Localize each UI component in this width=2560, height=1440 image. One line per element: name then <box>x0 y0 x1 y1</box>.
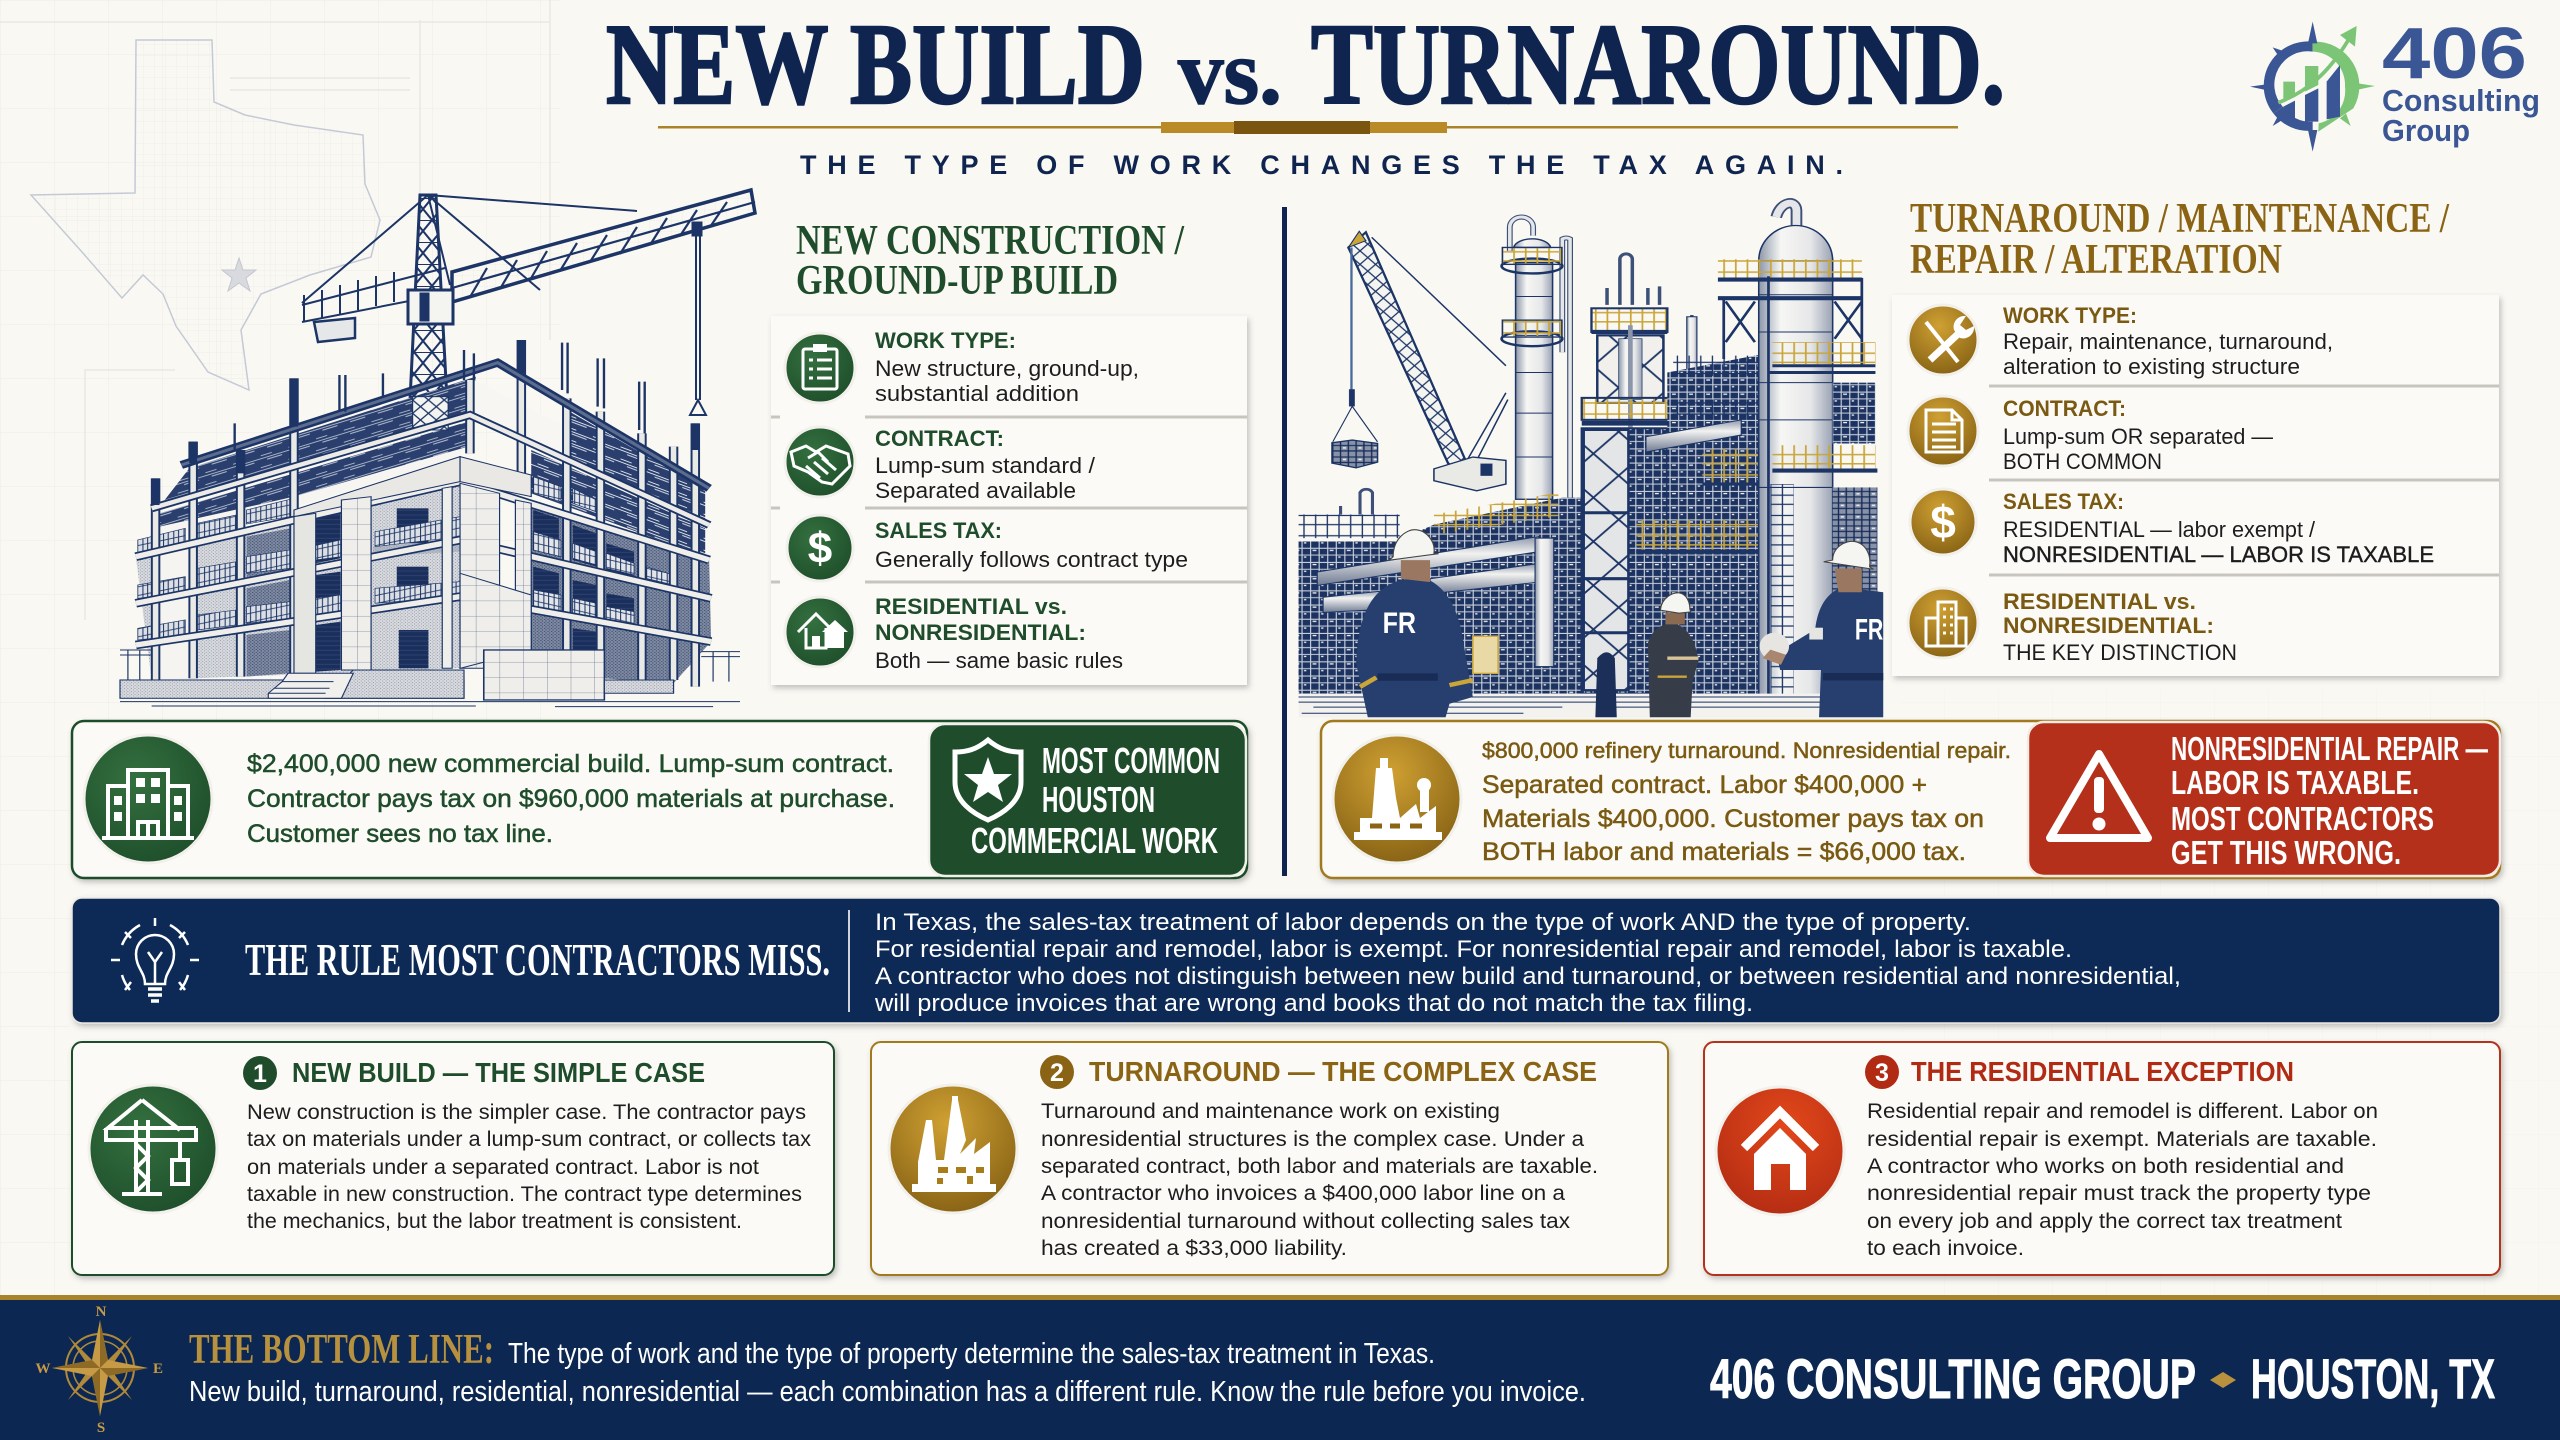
text: the bottom line <box>189 1327 1586 1408</box>
text: sales tax: SALES TAX: <box>875 518 1002 543</box>
number badge 1: 1 <box>253 1060 267 1088</box>
icon: light bulb <box>111 918 199 1001</box>
text: residential exception body: on every job and apply the correct tax treatment <box>1867 1210 2342 1233</box>
banner: the rule most contractors miss <box>72 898 2500 1023</box>
illustration: open upper storeys <box>160 377 705 557</box>
panel: new construction details <box>771 316 1247 685</box>
illustration: railings <box>138 477 674 640</box>
icon: warning triangle <box>2050 754 2148 838</box>
badge: most common houston commercial work: HOUSTON <box>1042 779 1155 820</box>
text: work type <box>2003 303 2333 379</box>
text: new build body <box>247 1101 812 1233</box>
number badge 1 <box>243 1056 277 1090</box>
heading: rule: THE RULE MOST CONTRACTORS MISS. <box>245 934 830 985</box>
icon: dollar: $ <box>1930 496 1956 548</box>
text: work type: WORK TYPE: <box>875 328 1016 353</box>
icon: factory <box>889 1085 1017 1213</box>
text: contract: Lump-sum OR separated — <box>2003 424 2273 449</box>
heading: new construction: GROUND-UP BUILD <box>796 258 1118 304</box>
icon: houses <box>785 597 855 667</box>
illustration: building under construction <box>120 340 740 707</box>
text: turnaround body: A contractor who invoices a $400,000 labor line on a <box>1041 1182 1565 1205</box>
panel: turnaround example <box>1321 721 2500 878</box>
text: residential exception body: Residential repair and remodel is different. Labor on <box>1867 1100 2378 1123</box>
map: Texas outline <box>0 0 550 620</box>
illustration: background worker <box>1595 652 1617 717</box>
logo: 406 Consulting Group <box>2250 14 2540 152</box>
illustration: crawler crane <box>1332 231 1508 491</box>
icon: crane <box>89 1085 217 1213</box>
illustration: center plant block <box>1636 352 1772 694</box>
text: new build body: New construction is the simpler case. The contractor pays <box>247 1101 806 1124</box>
icon: compass rose: E <box>153 1361 163 1377</box>
text: rule explanation: will produce invoices that are wrong and books that do not match the tax filing. <box>874 990 1753 1017</box>
icon: refinery <box>1333 735 1461 863</box>
text: residential vs nonresidential <box>2003 589 2237 665</box>
title: vs. <box>1178 21 1282 123</box>
text: turnaround body: Turnaround and maintenance work on existing <box>1041 1100 1500 1123</box>
number badge 3: 3 <box>1875 1059 1889 1087</box>
footer band <box>0 1295 2560 1440</box>
heading: turnaround: TURNAROUND — THE COMPLEX CASE <box>1089 1056 1597 1087</box>
text: turnaround example <box>1482 738 2011 866</box>
illustration: lower faces <box>136 482 711 683</box>
icon: wrench and screwdriver <box>1908 305 1978 375</box>
text: the bottom line: New build, turnaround, residential, nonresidential — each combination has a different rule. Know the rule before you invoice. <box>189 1376 1586 1408</box>
illustration: tower crane <box>302 190 755 415</box>
text: turnaround body: has created a $33,000 liability. <box>1041 1237 1347 1260</box>
icon: dollar <box>1910 489 1976 555</box>
text: turnaround body: nonresidential structures is the complex case. Under a <box>1041 1128 1584 1151</box>
illustration: center worker <box>1648 593 1698 717</box>
icon: compass rose <box>36 1304 163 1436</box>
icon: handshake <box>785 427 855 497</box>
text: contract: CONTRACT: <box>2003 396 2126 421</box>
text: company and location: 406 CONSULTING GROUP <box>1710 1347 2196 1410</box>
illustration: right worker: FR <box>1855 613 1883 646</box>
text: turnaround example: Separated contract. Labor $400,000 + <box>1482 771 1927 799</box>
logo: 406 Consulting Group: Group <box>2382 113 2470 148</box>
number badge 2 <box>1040 1055 1074 1089</box>
text: rule explanation <box>874 909 2181 1017</box>
card 2: turnaround <box>871 1042 1668 1275</box>
text: new build body: on materials under a separated contract. Labor is not <box>247 1156 759 1179</box>
text: new build body: the mechanics, but the labor treatment is consistent. <box>247 1210 742 1233</box>
text: turnaround body <box>1041 1100 1598 1260</box>
title <box>606 1 2005 129</box>
panel: turnaround details <box>1892 295 2499 676</box>
illustration: right worker <box>1760 541 1883 717</box>
illustration: concrete piers and parapet <box>294 457 531 673</box>
illustration: crane mast through roof <box>413 397 448 430</box>
text: rule explanation: For residential repair and remodel, labor is exempt. For nonresidential repair and remodel, labor is taxable. <box>875 936 2072 963</box>
icon: compass rose: N <box>96 1304 107 1320</box>
text: new build example: Contractor pays tax on $960,000 materials at purchase. <box>247 785 895 813</box>
illustration: rebar above roof <box>156 340 695 505</box>
text: residential vs nonresidential: NONRESIDENTIAL: <box>875 620 1086 645</box>
text: the bottom line: The type of work and the type of property determine the sales-tax treatment in Texas. <box>508 1338 1435 1370</box>
card 3: residential exception <box>1704 1042 2500 1275</box>
callout: nonresidential repair warning: LABOR IS TAXABLE. <box>2171 764 2419 801</box>
text: work type <box>875 328 1139 406</box>
panel: new build example <box>72 721 1247 878</box>
text: sales tax: SALES TAX: <box>2003 489 2124 514</box>
illustration: ground and podium <box>120 650 740 707</box>
text: new build body: taxable in new construction. The contract type determines <box>247 1183 802 1206</box>
badge: most common houston commercial work: MOST COMMON <box>1042 740 1220 781</box>
text: contract: CONTRACT: <box>875 426 1004 451</box>
illustration: center scaffold tower <box>1582 254 1697 694</box>
text: residential vs nonresidential <box>875 594 1123 673</box>
text: contract: BOTH COMMON <box>2003 449 2162 474</box>
illustration: left pipe run <box>1317 489 1554 667</box>
icon: document <box>1908 396 1978 466</box>
text: new build example: Customer sees no tax line. <box>247 820 553 848</box>
text: turnaround body: nonresidential turnaround without collecting sales tax <box>1041 1210 1571 1233</box>
illustration: left distillation tower <box>1502 217 1570 528</box>
text: new build body: tax on materials under a lump-sum contract, or collects tax <box>247 1128 812 1151</box>
number badge 3 <box>1865 1055 1899 1089</box>
illustration: left worker: FR <box>1383 606 1416 639</box>
heading: new construction <box>796 218 1185 304</box>
text: contract: Separated available <box>875 478 1076 503</box>
icon: dollar: $ <box>808 524 832 573</box>
title rule <box>658 121 1958 134</box>
text: contract <box>2003 396 2273 474</box>
text: residential vs nonresidential: Both — same basic rules <box>875 648 1123 673</box>
heading: turnaround <box>1910 196 2450 283</box>
text: turnaround example: BOTH labor and materials = $66,000 tax. <box>1482 838 1966 866</box>
text: sales tax: NONRESIDENTIAL — LABOR IS TAXABLE <box>2003 542 2434 567</box>
icon: dollar <box>787 515 853 581</box>
title: TURNAROUND. <box>1311 1 2005 129</box>
text: the bottom line: THE BOTTOM LINE: <box>189 1327 494 1373</box>
text: contract <box>875 426 1096 503</box>
icon: buildings <box>1908 588 1978 658</box>
text: new build example: $2,400,000 new commercial build. Lump-sum contract. <box>247 750 894 778</box>
text: residential exception body: nonresidential repair must track the property type <box>1867 1182 2371 1205</box>
title: NEW BUILD <box>606 1 1145 129</box>
badge: most common houston commercial work <box>929 724 1246 876</box>
card 1: new build <box>72 1042 834 1275</box>
text: residential vs nonresidential: NONRESIDENTIAL: <box>2003 613 2214 638</box>
text: residential exception body <box>1867 1100 2378 1260</box>
text: work type: substantial addition <box>875 381 1079 406</box>
text: sales tax <box>875 518 1188 572</box>
divider <box>1282 207 1287 876</box>
text: work type: WORK TYPE: <box>2003 303 2137 328</box>
text: residential exception body: A contractor who works on both residential and <box>1867 1155 2344 1178</box>
icon: compass rose: W <box>36 1361 50 1377</box>
text: turnaround body: separated contract, both labor and materials are taxable. <box>1041 1155 1598 1178</box>
text: turnaround example: Materials $400,000. Customer pays tax on <box>1482 805 1984 833</box>
text: residential vs nonresidential: RESIDENTIAL vs. <box>2003 589 2196 614</box>
illustration: lower plant block <box>1299 493 1586 694</box>
illustration: columns <box>156 340 695 687</box>
logo: 406 Consulting Group: Consulting <box>2382 83 2540 118</box>
logo: 406 Consulting Group: 406 <box>2382 14 2527 94</box>
callout: nonresidential repair warning <box>2028 722 2500 876</box>
badge: most common houston commercial work: COMMERCIAL WORK <box>971 820 1218 861</box>
icon: clipboard <box>785 333 855 403</box>
text: residential vs nonresidential: RESIDENTIAL vs. <box>875 594 1067 619</box>
illustration: floor slabs <box>136 363 711 645</box>
icon: house <box>1716 1087 1844 1215</box>
illustration: left worker <box>1356 530 1473 717</box>
text: work type: New structure, ground-up, <box>875 356 1139 381</box>
heading: new build: NEW BUILD — THE SIMPLE CASE <box>292 1057 705 1088</box>
icon: compass and chart logo mark <box>2250 22 2375 152</box>
number badge 2: 2 <box>1050 1059 1064 1087</box>
text: residential exception body: residential repair is exempt. Materials are taxable. <box>1867 1128 2377 1151</box>
heading: residential exception: THE RESIDENTIAL EXCEPTION <box>1911 1056 2294 1087</box>
subtitle: THE TYPE OF WORK CHANGES THE TAX AGAIN. <box>800 150 1843 180</box>
illustration: ground <box>1299 694 1882 717</box>
text: residential exception body: to each invoice. <box>1867 1237 2024 1260</box>
text: work type: alteration to existing structure <box>2003 354 2300 379</box>
illustration: right distillation tower <box>1718 203 1877 697</box>
text: sales tax <box>2003 489 2434 567</box>
text: new build example <box>247 750 895 848</box>
callout: nonresidential repair warning: MOST CONTRACTORS <box>2171 800 2434 837</box>
icon: compass rose: S <box>97 1420 105 1436</box>
text: rule explanation: In Texas, the sales-tax treatment of labor depends on the type of work AND the type of property. <box>875 909 1971 936</box>
text: rule explanation: A contractor who does not distinguish between new build and turnaround, or between residential and nonresidential, <box>875 963 2181 990</box>
icon: shield star <box>955 740 1021 820</box>
text: turnaround example: $800,000 refinery turnaround. Nonresidential repair. <box>1482 738 2011 763</box>
heading: turnaround: REPAIR / ALTERATION <box>1910 237 2282 283</box>
text: sales tax: Generally follows contract type <box>875 547 1188 572</box>
callout: nonresidential repair warning: GET THIS WRONG. <box>2171 834 2401 871</box>
text: contract: Lump-sum standard / <box>875 453 1096 478</box>
icon: office building <box>84 735 212 863</box>
illustration: refinery with workers <box>1299 203 1883 717</box>
text: sales tax: RESIDENTIAL — labor exempt / <box>2003 517 2316 542</box>
text: work type: Repair, maintenance, turnaround, <box>2003 329 2333 354</box>
text: residential vs nonresidential: THE KEY DISTINCTION <box>2003 640 2237 665</box>
heading: new construction: NEW CONSTRUCTION / <box>796 218 1185 264</box>
